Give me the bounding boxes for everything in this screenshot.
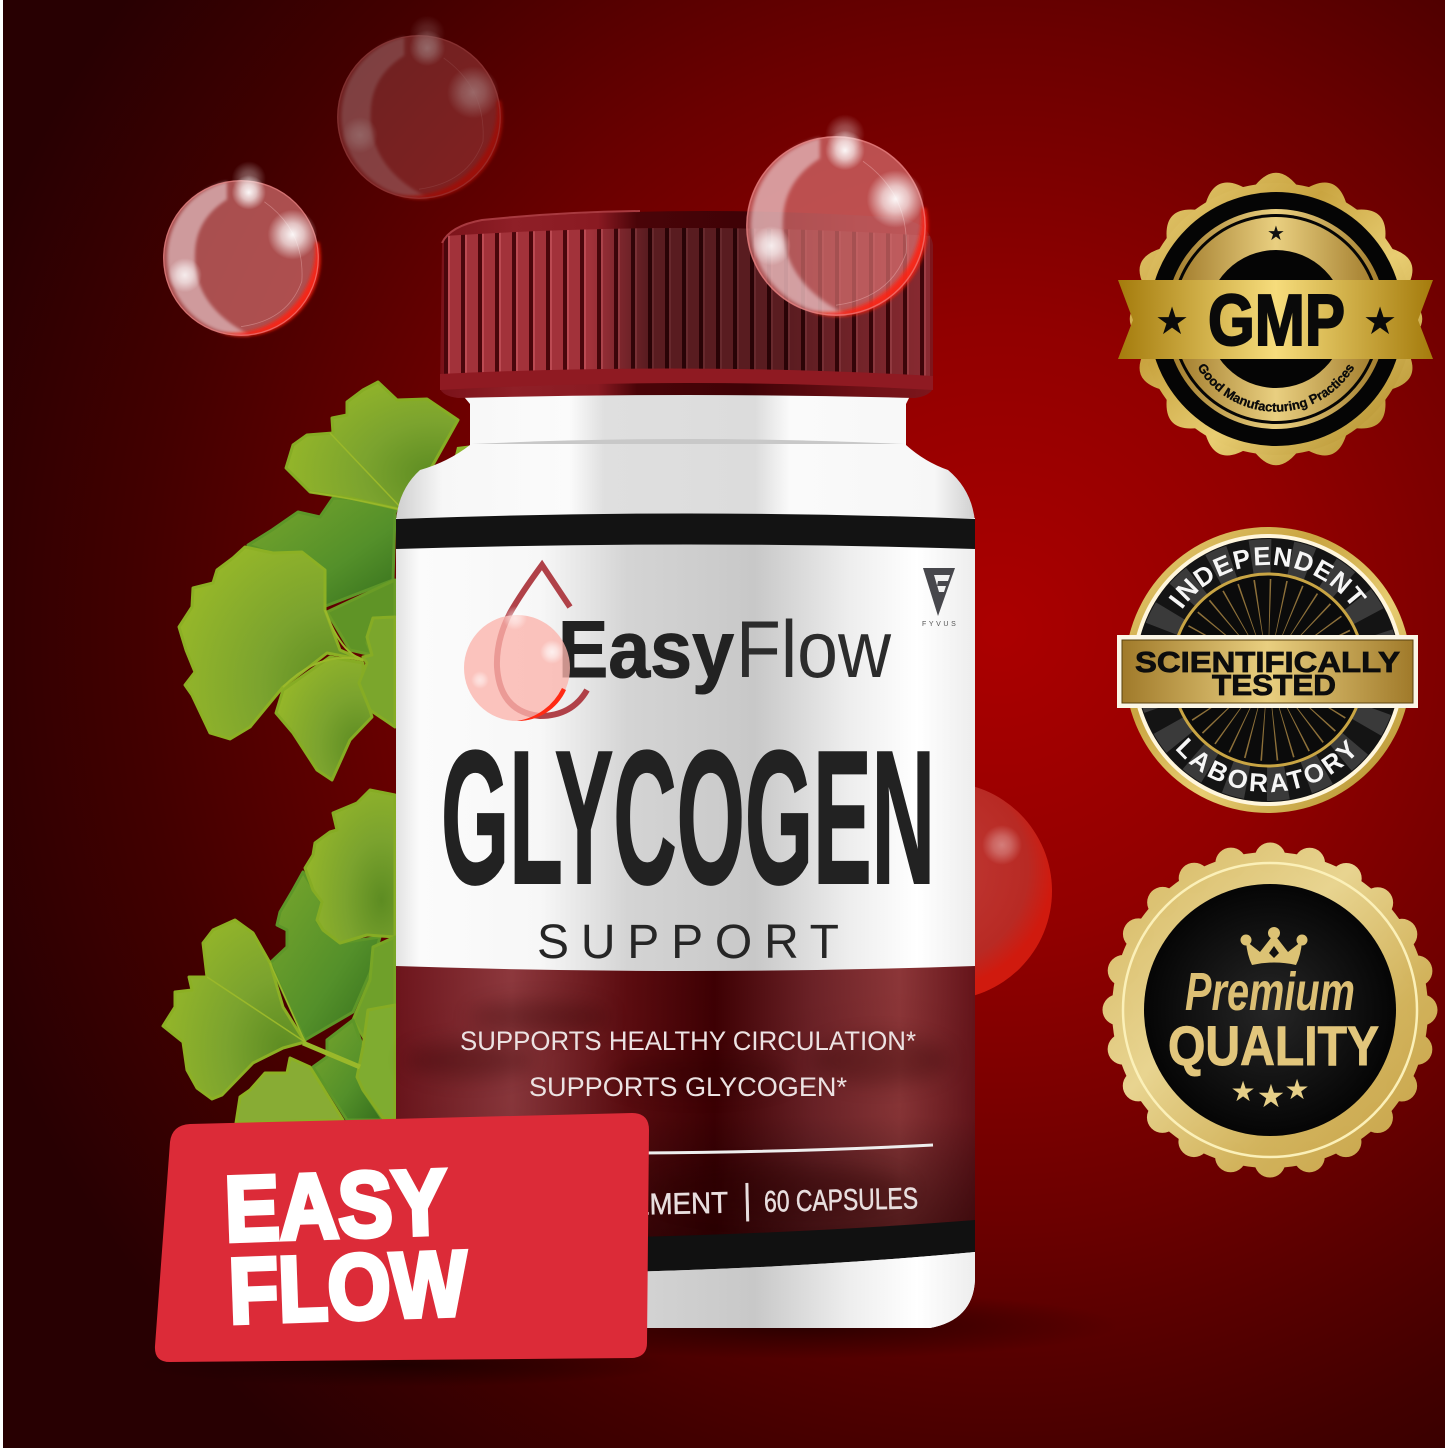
- badge: scientifically tested: [1117, 527, 1418, 813]
- star: ★: [1267, 223, 1285, 245]
- brand logo: [497, 565, 891, 716]
- bottom white base shading: [396, 1252, 975, 1328]
- shadow under bottle: [480, 1291, 1120, 1359]
- curved caption: Good Manufacturing Practices: [1198, 364, 1354, 412]
- crown icon: [1240, 927, 1308, 965]
- manufacturer mark: FYVUS: [922, 621, 958, 628]
- ribbon: [1118, 280, 1433, 359]
- three stars: ★: [1257, 1078, 1285, 1114]
- three stars: [1230, 1074, 1310, 1114]
- subtitle: SUPPORT: [537, 916, 839, 969]
- bottle neck and shoulder: [396, 386, 975, 522]
- benefit lines: SUPPORTS GLYCOGEN*: [529, 1072, 847, 1102]
- tag text: FLOW: [227, 1233, 469, 1343]
- badge: scientifically tested: LABORATORY: [1176, 738, 1354, 792]
- tag text: EASY: [223, 1151, 449, 1261]
- bubble: behind bottle right: [834, 782, 1052, 1000]
- ribbon stars: ★: [1155, 301, 1189, 343]
- bubble: left: [163, 161, 321, 336]
- bubble: on cap: [746, 114, 928, 316]
- GMP wordmark: GMP: [1208, 281, 1345, 361]
- top black band: [396, 514, 975, 549]
- ribbon text: [1135, 647, 1400, 702]
- brand name: [558, 605, 891, 695]
- curved labels: INDEPENDENT: [1168, 546, 1367, 609]
- leaf veins and stems: [207, 433, 403, 1067]
- brand name: Flow: [736, 605, 891, 695]
- benefit lines: [460, 1026, 916, 1102]
- red tag: easy flow: [155, 1113, 649, 1362]
- tag text: [223, 1151, 469, 1343]
- dietary supplement and count: SUPPLEMENT: [540, 1187, 728, 1224]
- ribbon stars: [1155, 301, 1397, 343]
- lower leaf cluster: [163, 790, 395, 1123]
- bottle body: [396, 518, 975, 1328]
- blood drop icon: [497, 565, 587, 716]
- dietary supplement and count: [540, 1179, 918, 1226]
- ribbon: [1117, 635, 1418, 708]
- bubble: small on logo: [464, 606, 570, 721]
- dietary supplement and count: 60 CAPSULES: [764, 1182, 918, 1219]
- shadow under tag: [130, 1343, 670, 1387]
- ribbon stars: ★: [1363, 301, 1397, 343]
- benefit lines: SUPPORTS HEALTHY CIRCULATION*: [460, 1026, 916, 1056]
- bottle: [396, 211, 975, 1328]
- badge: GMP: [1118, 172, 1433, 466]
- scalloped gold edge: [1130, 173, 1422, 465]
- maroon label band: [396, 966, 975, 1240]
- sunburst: [1213, 615, 1323, 725]
- ginkgo leaves: [163, 382, 473, 1123]
- bubble: top: [337, 15, 503, 199]
- ribbon text: SCIENTIFICALLY: [1135, 647, 1400, 679]
- upper leaf cluster: [179, 382, 473, 780]
- three stars: ★: [1230, 1076, 1256, 1107]
- bottom black band: [396, 1220, 975, 1274]
- manufacturer mark: [922, 568, 958, 628]
- three stars: ★: [1284, 1074, 1310, 1105]
- badge: premium quality: [1112, 852, 1428, 1168]
- smoke texture in label band: [405, 1001, 950, 1214]
- ribbon text: TESTED: [1212, 670, 1336, 702]
- bottle cap: [440, 211, 933, 398]
- quality word: QUALITY: [1168, 1014, 1379, 1077]
- premium script: Premium: [1185, 962, 1355, 1022]
- label divider: [640, 1145, 933, 1153]
- brand name: Easy: [558, 605, 734, 695]
